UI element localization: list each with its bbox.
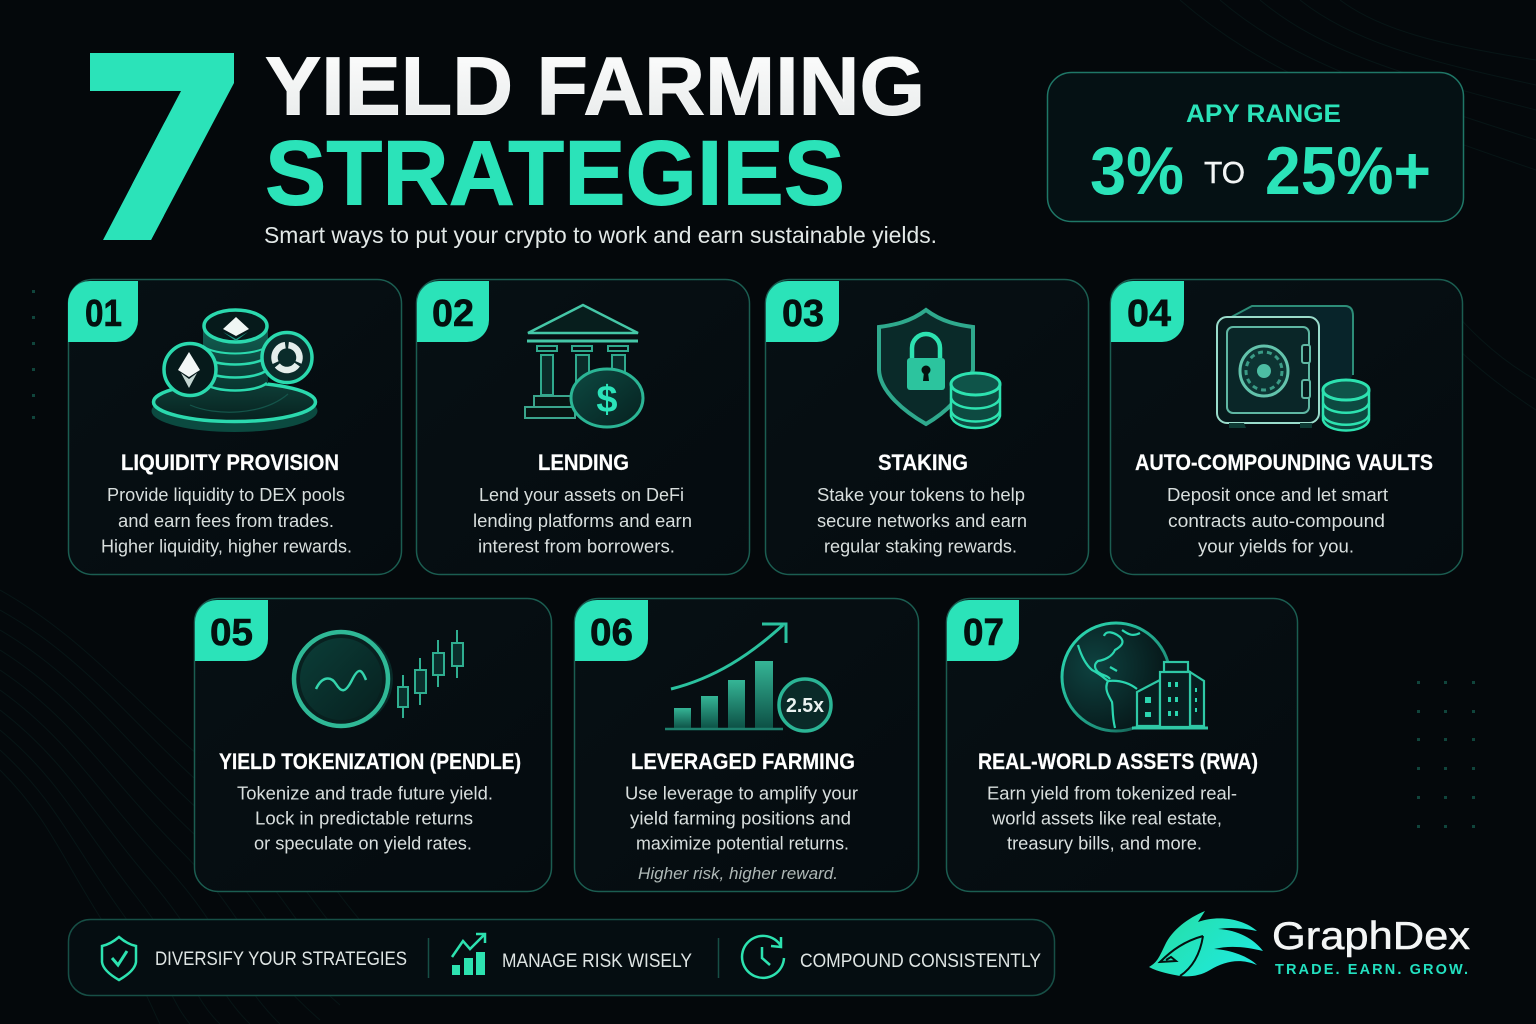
icon: bar chart with arrow and 2.5x: 2.5x (786, 695, 824, 717)
description: Earn yield from tokenized real- (987, 782, 1237, 804)
description: Deposit once and let smart (1167, 484, 1388, 505)
description: and earn fees from trades. (118, 510, 334, 531)
icon: bar chart with arrow and 2.5x (665, 624, 831, 731)
description: world assets like real estate, (991, 808, 1222, 828)
description: or speculate on yield rates. (254, 832, 472, 854)
icon: clock (742, 936, 784, 978)
tip: diversify: DIVERSIFY YOUR STRATEGIES (155, 949, 407, 970)
description: Higher liquidity, higher rewards. (101, 536, 352, 556)
panel: 05 yield tokenization (194, 598, 552, 892)
heading: YIELD TOKENIZATION (PENDLE) (219, 749, 521, 774)
title line: yield farming: YIELD FARMING (265, 40, 925, 132)
wordmark: GraphDex (1272, 915, 1471, 958)
description: treasury bills, and more. (1007, 832, 1202, 854)
icon: bank with dollar coin (525, 305, 643, 427)
icon: globe and buildings (1062, 623, 1208, 731)
badge 07 (947, 600, 1019, 661)
panel: 02 lending (416, 280, 750, 574)
description (101, 484, 352, 556)
description (817, 484, 1027, 556)
risk note: Higher risk, higher reward. (638, 864, 838, 883)
description: maximize potential returns. (636, 832, 849, 854)
icon: safe vault and coins (1217, 306, 1369, 430)
description: yield farming positions and (630, 808, 851, 828)
heading: LEVERAGED FARMING (631, 749, 855, 774)
panel: 04 auto-compounding vaults (1110, 280, 1462, 574)
APY label: APY RANGE (1186, 100, 1341, 128)
badge 04 (1111, 281, 1184, 342)
description (237, 782, 493, 854)
icon: shield check (102, 937, 136, 980)
description: regular staking rewards. (824, 536, 1017, 556)
title line: strategies: STRATEGIES (265, 122, 845, 224)
badge 05 (195, 600, 268, 661)
description: Stake your tokens to help (817, 484, 1025, 505)
badge 02 (417, 281, 489, 342)
description: Tokenize and trade future yield. (237, 782, 493, 804)
badge 06 (575, 600, 648, 661)
panel: 06 leveraged farming (574, 598, 918, 892)
icon: chart with arrow (452, 934, 485, 975)
icon: dragon mark (1149, 911, 1263, 976)
tip: manage risk: MANAGE RISK WISELY (502, 951, 692, 972)
panel: APY range (1048, 72, 1464, 222)
title (265, 40, 925, 224)
description: your yields for you. (1198, 536, 1354, 556)
badge 07: 07 (963, 612, 1004, 654)
badge 05: 05 (210, 612, 253, 654)
APY high value: 25%+ (1265, 133, 1431, 209)
heading: LENDING (538, 450, 629, 475)
APY low value: 3% (1090, 133, 1184, 209)
badge 06: 06 (590, 612, 633, 654)
badge 01 (68, 281, 138, 342)
icon: bank with dollar coin: $ (596, 379, 618, 421)
badge 01: 01 (85, 293, 122, 335)
heading: REAL-WORLD ASSETS (RWA) (978, 749, 1258, 774)
icon: shield, lock and coins (879, 310, 1000, 428)
description (473, 484, 692, 556)
panel: 01 liquidity provision (68, 280, 402, 574)
bottom tips bar (68, 920, 1054, 996)
heading: AUTO-COMPOUNDING VAULTS (1135, 450, 1433, 475)
logo: GraphDex (1149, 911, 1471, 978)
description: interest from borrowers. (478, 536, 675, 556)
tagline: TRADE. EARN. GROW. (1275, 962, 1468, 978)
description (987, 782, 1237, 854)
heading: STAKING (878, 450, 968, 475)
badge 03: 03 (782, 293, 824, 335)
description: Lend your assets on DeFi (479, 484, 684, 505)
heading: LIQUIDITY PROVISION (121, 450, 339, 475)
description: contracts auto-compound (1168, 510, 1385, 531)
description: Provide liquidity to DEX pools (107, 484, 345, 505)
badge 04: 04 (1127, 293, 1171, 335)
description: lending platforms and earn (473, 510, 692, 531)
badge 02: 02 (432, 293, 474, 335)
icon: token coin and candlesticks (294, 630, 463, 727)
tip: compound: COMPOUND CONSISTENTLY (800, 951, 1041, 972)
description: secure networks and earn (817, 510, 1027, 531)
APY to: TO (1204, 155, 1245, 190)
panel: 03 staking (766, 280, 1088, 574)
subtitle: Smart ways to put your crypto to work and earn sustainable yields. (264, 222, 937, 248)
big number 7: 7 (82, 0, 238, 297)
description (625, 782, 858, 854)
description: Use leverage to amplify your (625, 782, 858, 804)
icon: liquidity pool coins (152, 310, 318, 432)
description (1167, 484, 1388, 556)
panel: 07 real-world assets (946, 598, 1298, 892)
description: Lock in predictable returns (255, 808, 473, 828)
badge 03 (766, 281, 839, 342)
